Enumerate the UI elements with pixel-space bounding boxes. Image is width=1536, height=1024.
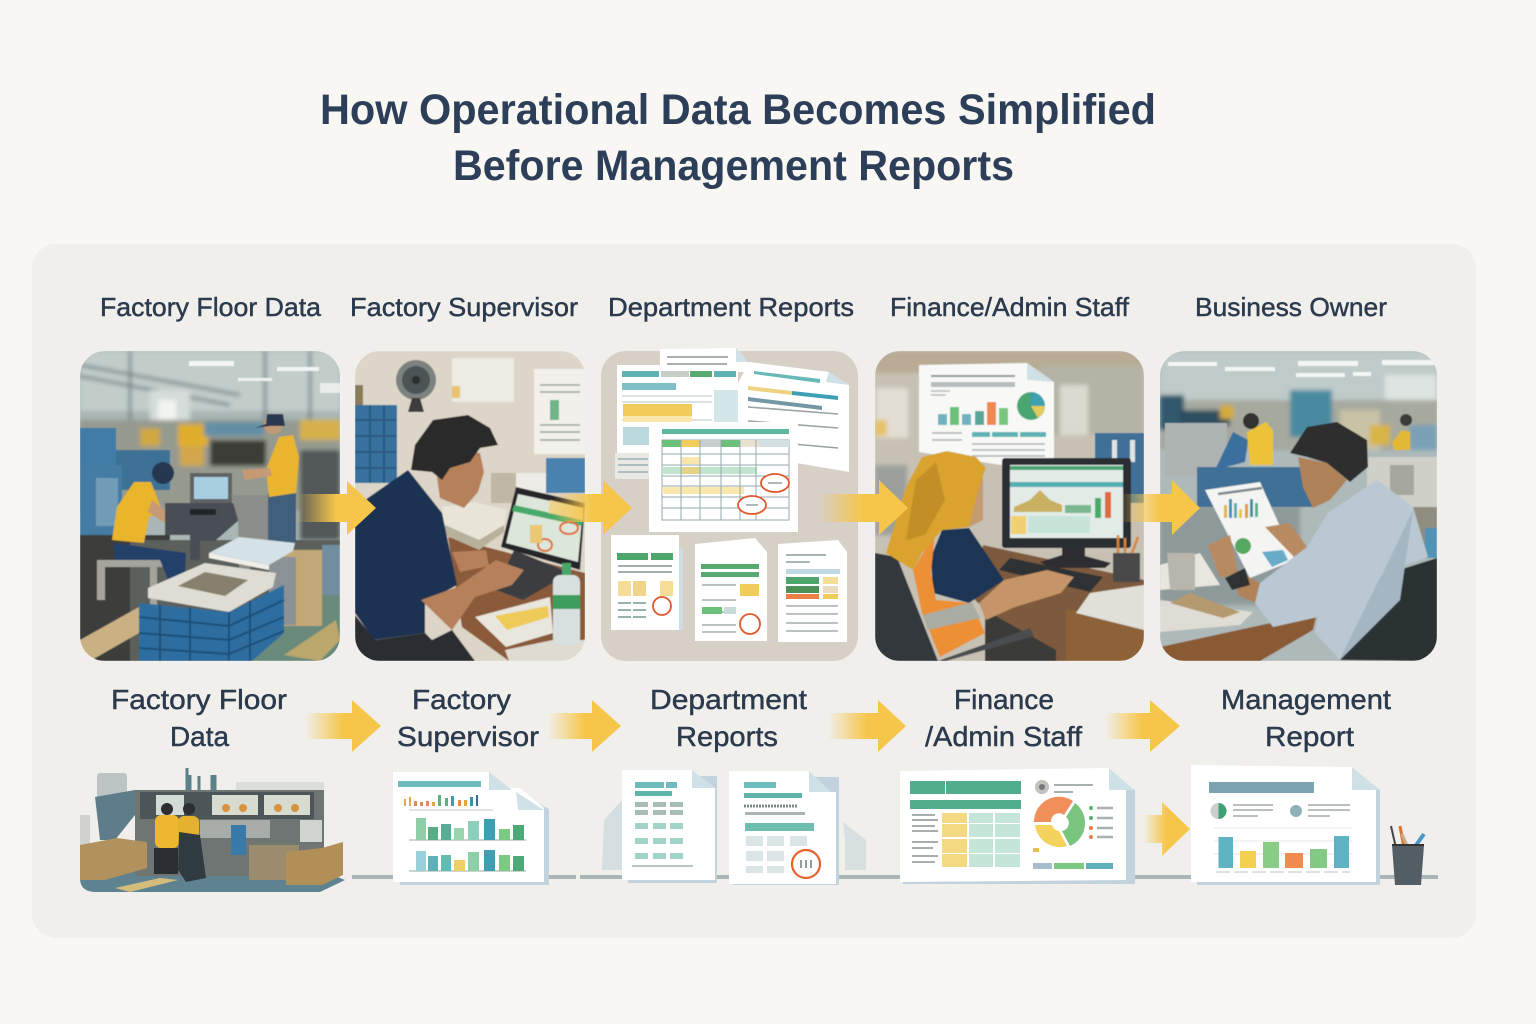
arrow: supervisor to department reports [553, 480, 632, 535]
panel: process flow [32, 244, 1476, 938]
photo panel: factory floor workers [80, 351, 340, 661]
document: department reports pair [602, 770, 866, 885]
panel: department reports paper pile [601, 348, 858, 661]
photo panel: factory supervisor at laptop [355, 351, 585, 661]
paper: lower right report [778, 540, 847, 642]
ground shadow lines [352, 875, 1438, 879]
paper: right text sheet [738, 362, 849, 472]
document: supervisor charts [393, 772, 549, 885]
illustration: factory machine and workers [80, 768, 345, 892]
title [320, 86, 1156, 190]
lower row labels: Factory [412, 684, 511, 715]
document: management report [1191, 765, 1380, 885]
chart: donut [1034, 797, 1085, 847]
document: finance summary [900, 768, 1135, 884]
sheet: marked-up report [729, 771, 839, 885]
lower row labels: Factory Floor [111, 684, 287, 715]
heading row: stage names [100, 292, 1387, 322]
lower row labels: Report [1265, 721, 1354, 752]
lower row labels [111, 684, 1391, 752]
heading row: stage names: Factory Floor Data [100, 292, 322, 322]
arrow: finance to business owner [1120, 480, 1200, 535]
lower row labels: /Admin Staff [925, 721, 1082, 752]
sheet: table report [622, 770, 717, 883]
arrow: lower row 4 [1105, 700, 1180, 752]
title: Before Management Reports [453, 142, 1014, 190]
arrow: lower row 3 [828, 700, 906, 752]
paper: lower left report [611, 535, 683, 630]
arrow: into management report [1143, 802, 1190, 856]
arrow: factory floor to supervisor [296, 481, 376, 535]
arrow: lower row 1 [305, 700, 381, 752]
lower row labels: Data [170, 721, 229, 752]
heading row: stage names: Factory Supervisor [350, 292, 578, 322]
photo panel: business owner reading report [1160, 351, 1437, 661]
arrow: lower row 2 [548, 700, 621, 752]
heading row: stage names: Department Reports [608, 292, 854, 322]
arrow: department reports to finance [818, 480, 908, 535]
lower row labels: Management [1221, 684, 1391, 715]
lower row labels: Reports [676, 721, 778, 752]
paper: central marked-up spreadsheet [649, 422, 798, 532]
lower row labels: Supervisor [397, 721, 539, 752]
photo panel: finance staff at desktop [875, 351, 1144, 661]
lower row labels: Department [650, 684, 807, 715]
lower row labels: Finance [954, 684, 1054, 715]
heading row: stage names: Finance/Admin Staff [890, 292, 1130, 322]
paper: lower middle report [695, 538, 767, 641]
paper: top sheet [660, 348, 748, 372]
heading row: stage names: Business Owner [1195, 292, 1387, 322]
icon: pen cup [1391, 826, 1424, 885]
paper: left table sheet [615, 365, 738, 479]
title: How Operational Data Becomes Simplified [320, 86, 1156, 134]
